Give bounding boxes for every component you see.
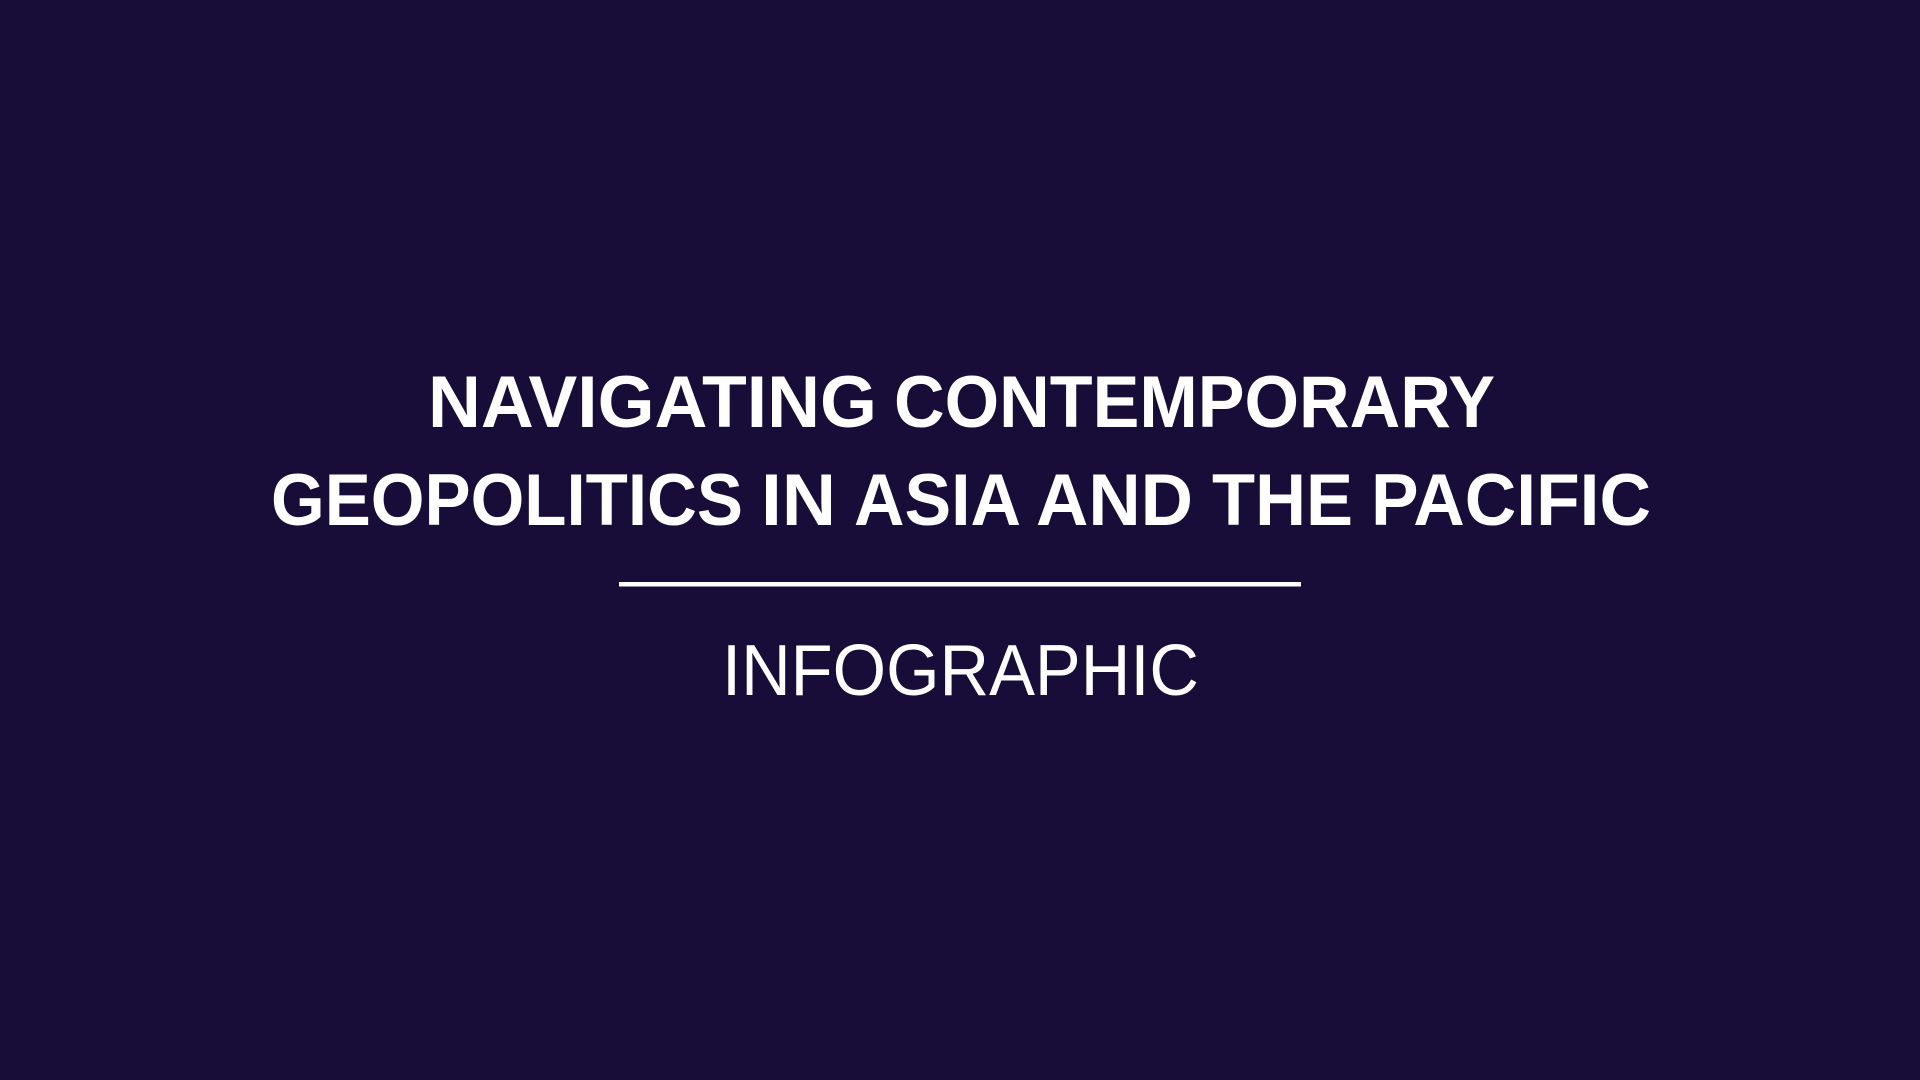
title: CONTEMPORARY (894, 362, 1495, 443)
title: AND (1036, 460, 1193, 541)
title: GEOPOLITICS (271, 460, 743, 541)
title: IN (761, 460, 836, 541)
title: PACIFIC (1371, 460, 1651, 541)
subtitle: INFOGRAPHIC (722, 631, 1199, 711)
title: NAVIGATING (428, 362, 877, 443)
title (271, 362, 1651, 541)
divider rule (619, 582, 1301, 586)
title: ASIA (854, 460, 1021, 541)
title: THE (1212, 460, 1353, 541)
